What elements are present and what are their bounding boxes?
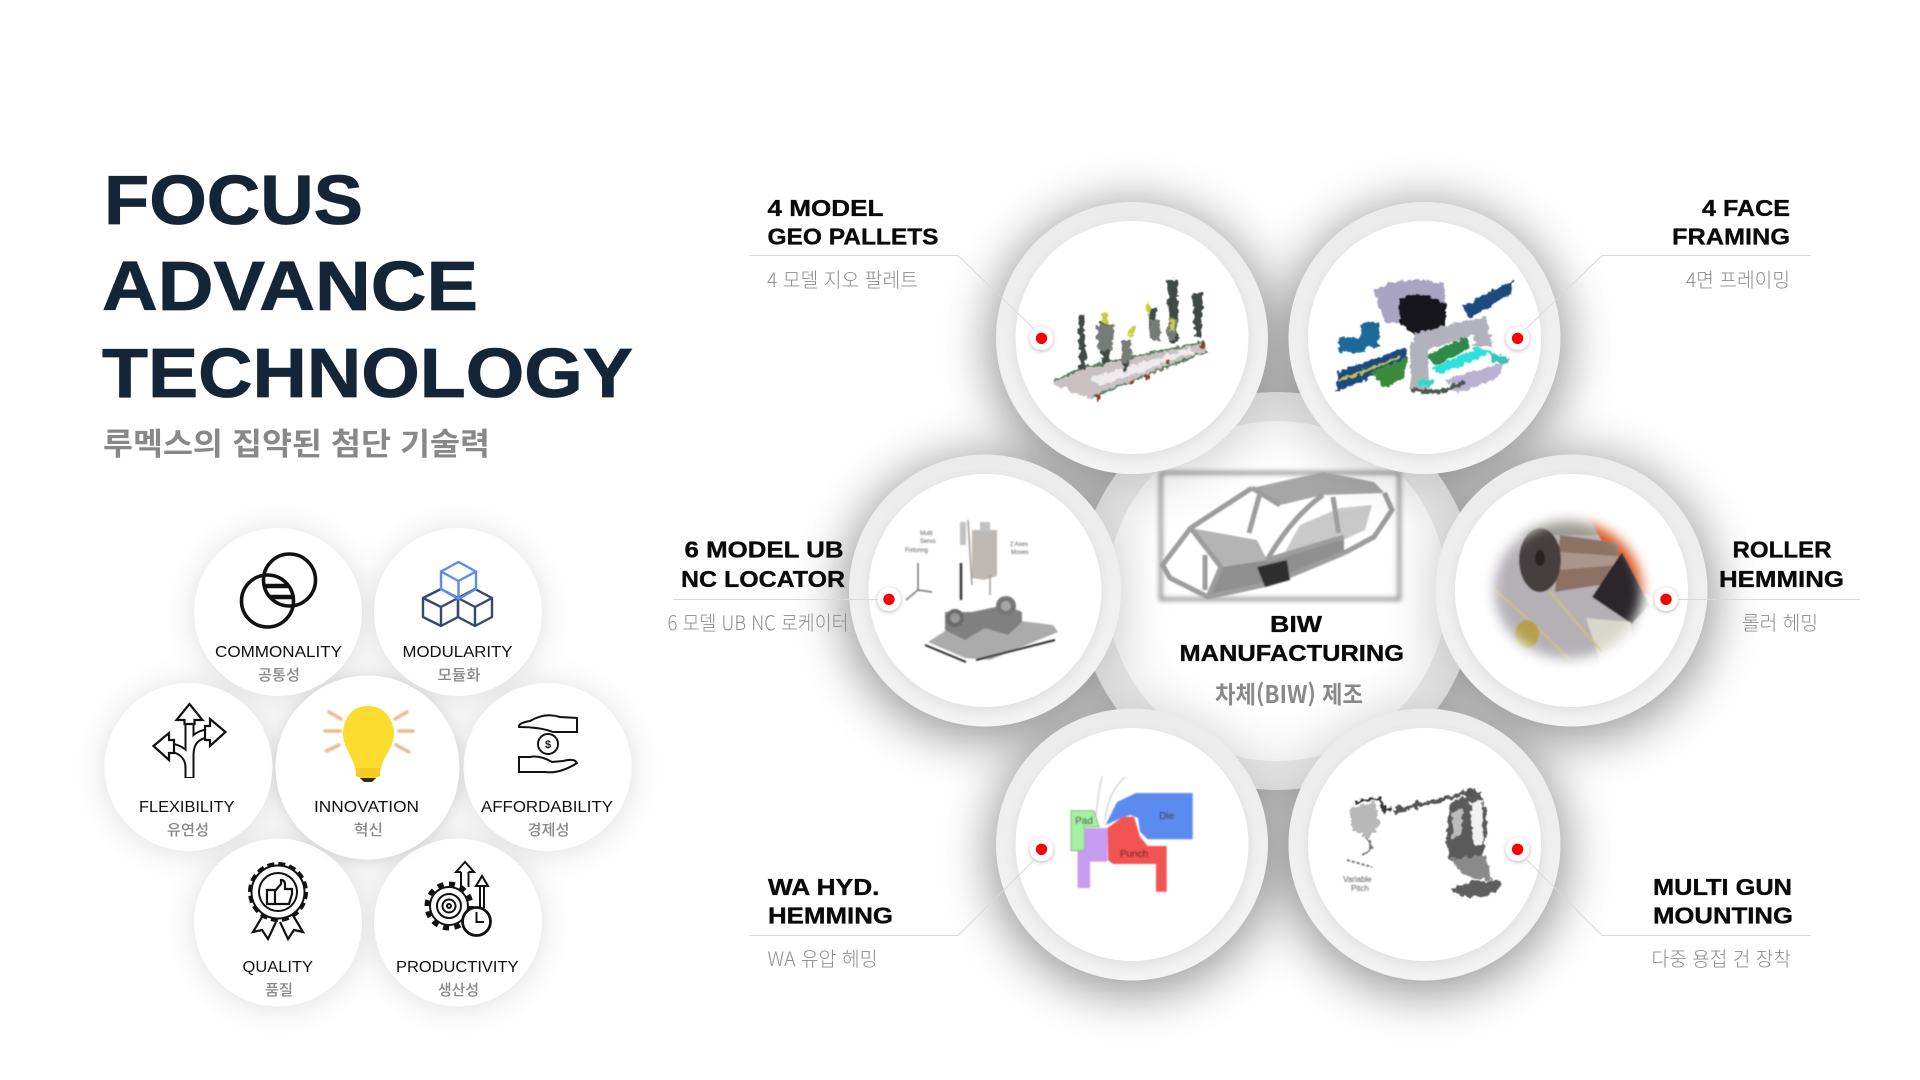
label: variable pitch: Pitch: [1351, 884, 1369, 893]
icon: innovation light bulb: [325, 706, 413, 782]
label: affordability: 경제성: [528, 819, 570, 840]
image: hemming diagram: Die: [1159, 811, 1175, 822]
icon: flexibility arrows: [154, 704, 226, 778]
marker: [1506, 838, 1529, 861]
label: innovation: 혁신: [354, 819, 383, 840]
panel: multi gun mounting: [1288, 708, 1560, 980]
callout: multi gun mounting: 다중 용접 건 장착: [1652, 943, 1791, 972]
label: modularity: 모듈화: [438, 664, 481, 685]
label: commonality: [215, 644, 342, 685]
label: innovation: INNOVATION: [314, 799, 419, 816]
callout: roller hemming: ROLLER: [1732, 536, 1832, 562]
callout: roller hemming: [1678, 536, 1860, 636]
callout: WA hyd hemming: HEMMING: [768, 902, 893, 928]
centre image frame: [1161, 473, 1399, 599]
panel: roller hemming: [1436, 454, 1708, 726]
panel: seven values cluster: [104, 528, 632, 1008]
callout: 4 face framing: FRAMING: [1672, 224, 1790, 250]
callout: 4 model geo pallets: 4 모델 지오 팔레트: [767, 264, 918, 293]
panel: 4 model geo pallets: [996, 202, 1268, 474]
icon: affordability hands and coin: $: [545, 739, 551, 751]
callout: WA hyd hemming: WA HYD.: [768, 874, 880, 900]
image: NC locator: Moves: [1011, 550, 1029, 556]
label: commonality: COMMONALITY: [215, 644, 342, 661]
title: TECHNOLOGY: [102, 334, 633, 412]
panel: process hub shadows: [849, 210, 1708, 988]
image: framing station: [1337, 280, 1513, 394]
callout: WA hyd hemming: [750, 860, 1034, 972]
cluster discs: [104, 528, 632, 1006]
marker: [1506, 327, 1529, 350]
label: flexibility: 유연성: [167, 819, 209, 840]
image: roller photo: [1487, 513, 1652, 666]
callout: WA hyd hemming: WA 유압 헤밍: [768, 943, 878, 972]
disc shadow overlay on centre: [849, 210, 1708, 988]
title: FOCUS: [104, 161, 363, 239]
label: quality: 품질: [265, 979, 293, 1000]
icon: productivity gear, clock and arrows: [427, 862, 490, 936]
label: modularity: [402, 644, 512, 685]
label: commonality: 공통성: [258, 664, 300, 685]
label: flexibility: FLEXIBILITY: [139, 799, 234, 816]
image: NC locator: Servo: [920, 539, 936, 545]
image: NC locator: Fixturing: [905, 548, 928, 554]
callout: 4 model geo pallets: [750, 195, 1034, 329]
label: productivity: [396, 959, 518, 1000]
callout: multi gun mounting: MULTI GUN: [1653, 874, 1792, 900]
callout: 6 model UB NC locator: 6 MODEL UB: [684, 536, 844, 562]
label: BIW manufacturing: BIW: [1270, 611, 1322, 637]
image: hemming diagram: Pad: [1075, 816, 1093, 827]
icon: modularity: [423, 562, 492, 626]
label: BIW manufacturing: [1180, 611, 1404, 710]
icon: quality rosette: [250, 864, 306, 939]
callout: multi gun mounting: MOUNTING: [1653, 902, 1793, 928]
panel: 6 model UB NC locator: [849, 454, 1121, 726]
image: hemming diagram: [1071, 776, 1193, 892]
callout: 4 face framing: 4면 프레이밍: [1686, 264, 1790, 293]
callout: 4 face framing: [1527, 195, 1811, 328]
label: variable pitch: [1343, 860, 1372, 893]
label: innovation: [314, 799, 419, 840]
label: productivity: PRODUCTIVITY: [396, 959, 518, 976]
callout: multi gun mounting: [1525, 858, 1811, 972]
callout: 6 model UB NC locator: NC LOCATOR: [681, 566, 845, 592]
title: [102, 161, 633, 412]
label: BIW manufacturing: MANUFACTURING: [1180, 640, 1404, 666]
subtitle: 루멕스의 집약된 첨단 기술력: [103, 419, 490, 464]
image: car body in white: [1162, 472, 1392, 597]
image: NC locator: Multi: [920, 531, 933, 537]
callout: 4 face framing: 4 FACE: [1702, 195, 1790, 221]
label: variable pitch: Variable: [1343, 875, 1372, 884]
panel: 4 face framing: [1288, 202, 1560, 474]
label: productivity: 생산성: [438, 979, 479, 1000]
icon: affordability hands and coin: [519, 715, 577, 772]
marker: [1030, 327, 1053, 350]
callout: 4 model geo pallets: GEO PALLETS: [768, 224, 938, 250]
callout: 6 model UB NC locator: [668, 536, 878, 636]
image: pallet fixture: [1052, 280, 1207, 400]
marker: [1654, 588, 1678, 611]
image: hemming diagram: Punch: [1120, 849, 1148, 860]
marker: [1030, 838, 1053, 861]
image: NC locator: 2 Axes: [1010, 542, 1028, 548]
marker: [877, 588, 901, 611]
callout: 6 model UB NC locator: 6 모델 UB NC 로케이터: [668, 607, 848, 636]
label: modularity: MODULARITY: [402, 644, 512, 661]
label: flexibility: [139, 799, 234, 840]
panel: WA hydraulic hemming: [996, 708, 1268, 980]
icon: commonality: [242, 554, 316, 627]
panel: centre BIW manufacturing disc: [1078, 392, 1476, 790]
callout: roller hemming: 롤러 헤밍: [1742, 607, 1818, 636]
cluster shadow: [104, 530, 632, 1008]
label: quality: QUALITY: [242, 959, 313, 976]
image: NC locator: [905, 520, 1058, 662]
label: BIW manufacturing: 차체(BIW) 제조: [1215, 675, 1363, 710]
callout: 4 model geo pallets: 4 MODEL: [768, 195, 884, 221]
label: affordability: AFFORDABILITY: [481, 799, 613, 816]
callout: roller hemming: HEMMING: [1719, 566, 1844, 592]
label: quality: [242, 959, 313, 1000]
label: affordability: [481, 799, 613, 840]
title: ADVANCE: [102, 247, 478, 325]
image: welding robot: [1350, 787, 1500, 897]
